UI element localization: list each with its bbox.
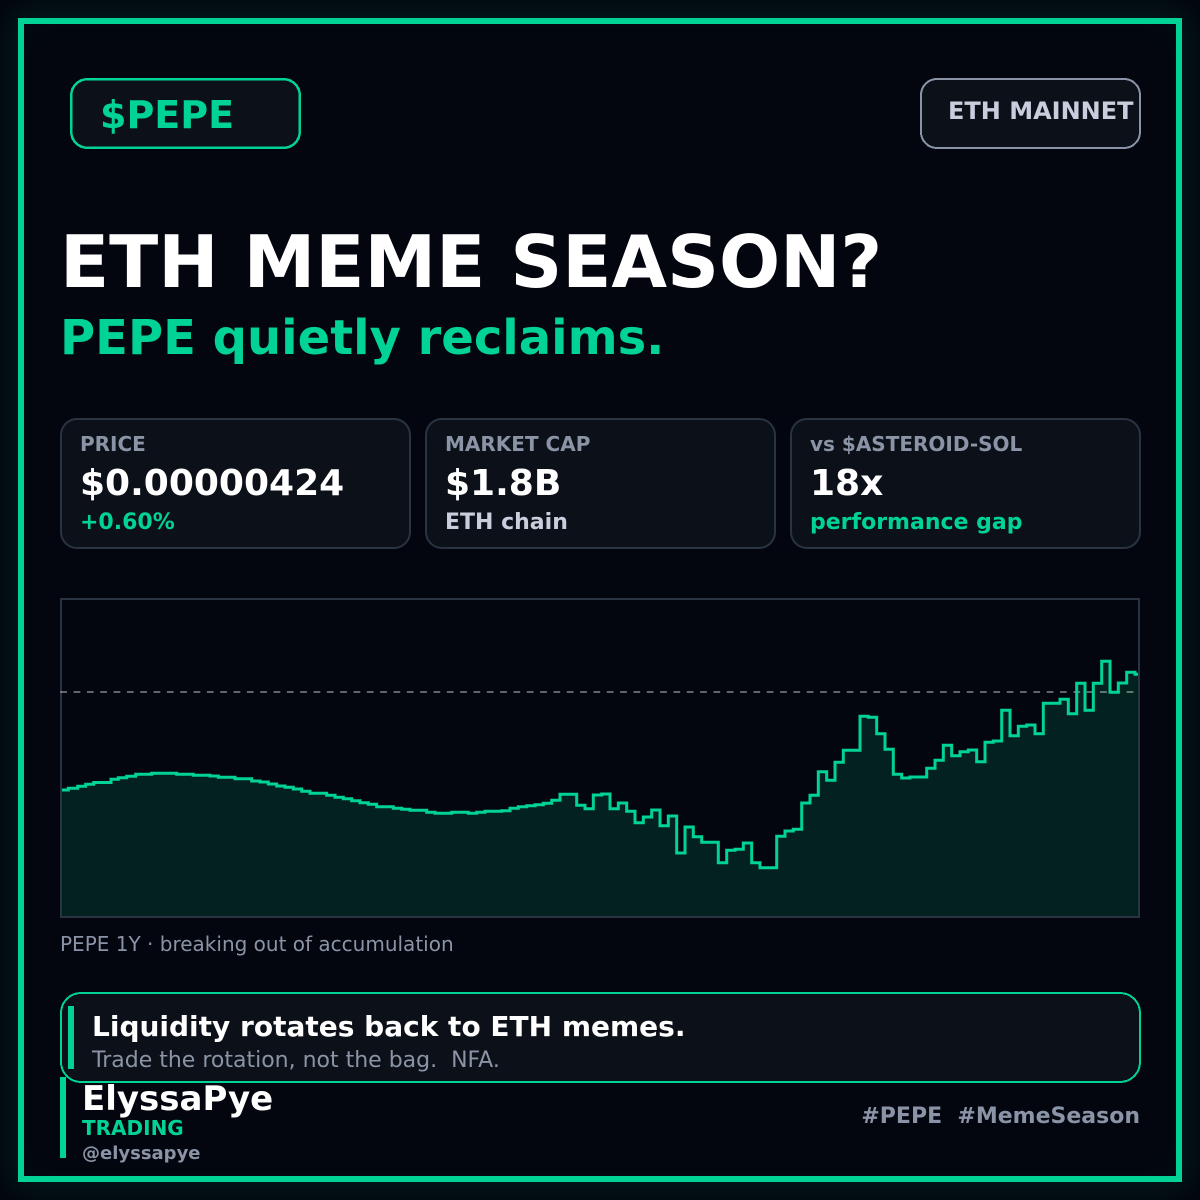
hashtags: #PEPE #MemeSeason — [861, 1104, 1140, 1129]
stat card: market cap: ETH chain — [445, 510, 568, 535]
stat card: market cap: MARKET CAP — [445, 432, 590, 456]
ticker badge: $PEPE — [71, 79, 300, 148]
network badge: ETH MAINNET: ETH MAINNET — [948, 97, 1134, 125]
price chart — [60, 599, 1139, 917]
chart caption: PEPE 1Y · breaking out of accumulation — [60, 932, 454, 956]
callout — [61, 993, 1140, 1082]
author block: TRADING — [82, 1116, 184, 1140]
stat card: vs $ASTEROID-SOL — [791, 419, 1140, 548]
title: ETH MEME SEASON? — [60, 220, 882, 304]
network badge: ETH MAINNET — [921, 79, 1140, 148]
stat card: price — [61, 419, 410, 548]
stat card: price: +0.60% — [80, 510, 175, 535]
author block: @elyssapye — [82, 1143, 201, 1164]
author block — [82, 1079, 273, 1164]
subtitle: PEPE quietly reclaims. — [60, 310, 664, 366]
callout: Trade the rotation, not the bag. NFA. — [91, 1048, 500, 1073]
ticker badge: $PEPE: $PEPE — [100, 93, 234, 137]
stat card: vs $ASTEROID-SOL: performance gap — [810, 510, 1022, 535]
author block: ElyssaPye — [82, 1079, 273, 1119]
stat card: vs $ASTEROID-SOL: vs $ASTEROID-SOL — [810, 432, 1023, 456]
footer accent bar — [60, 1077, 66, 1158]
stat card: price: PRICE — [80, 432, 146, 456]
stat card: price: $0.00000424 — [80, 463, 344, 504]
stat card: market cap — [426, 419, 775, 548]
stat card: market cap: $1.8B — [445, 463, 561, 504]
stat card: vs $ASTEROID-SOL: 18x — [810, 463, 883, 504]
callout: Liquidity rotates back to ETH memes. — [92, 1010, 685, 1043]
